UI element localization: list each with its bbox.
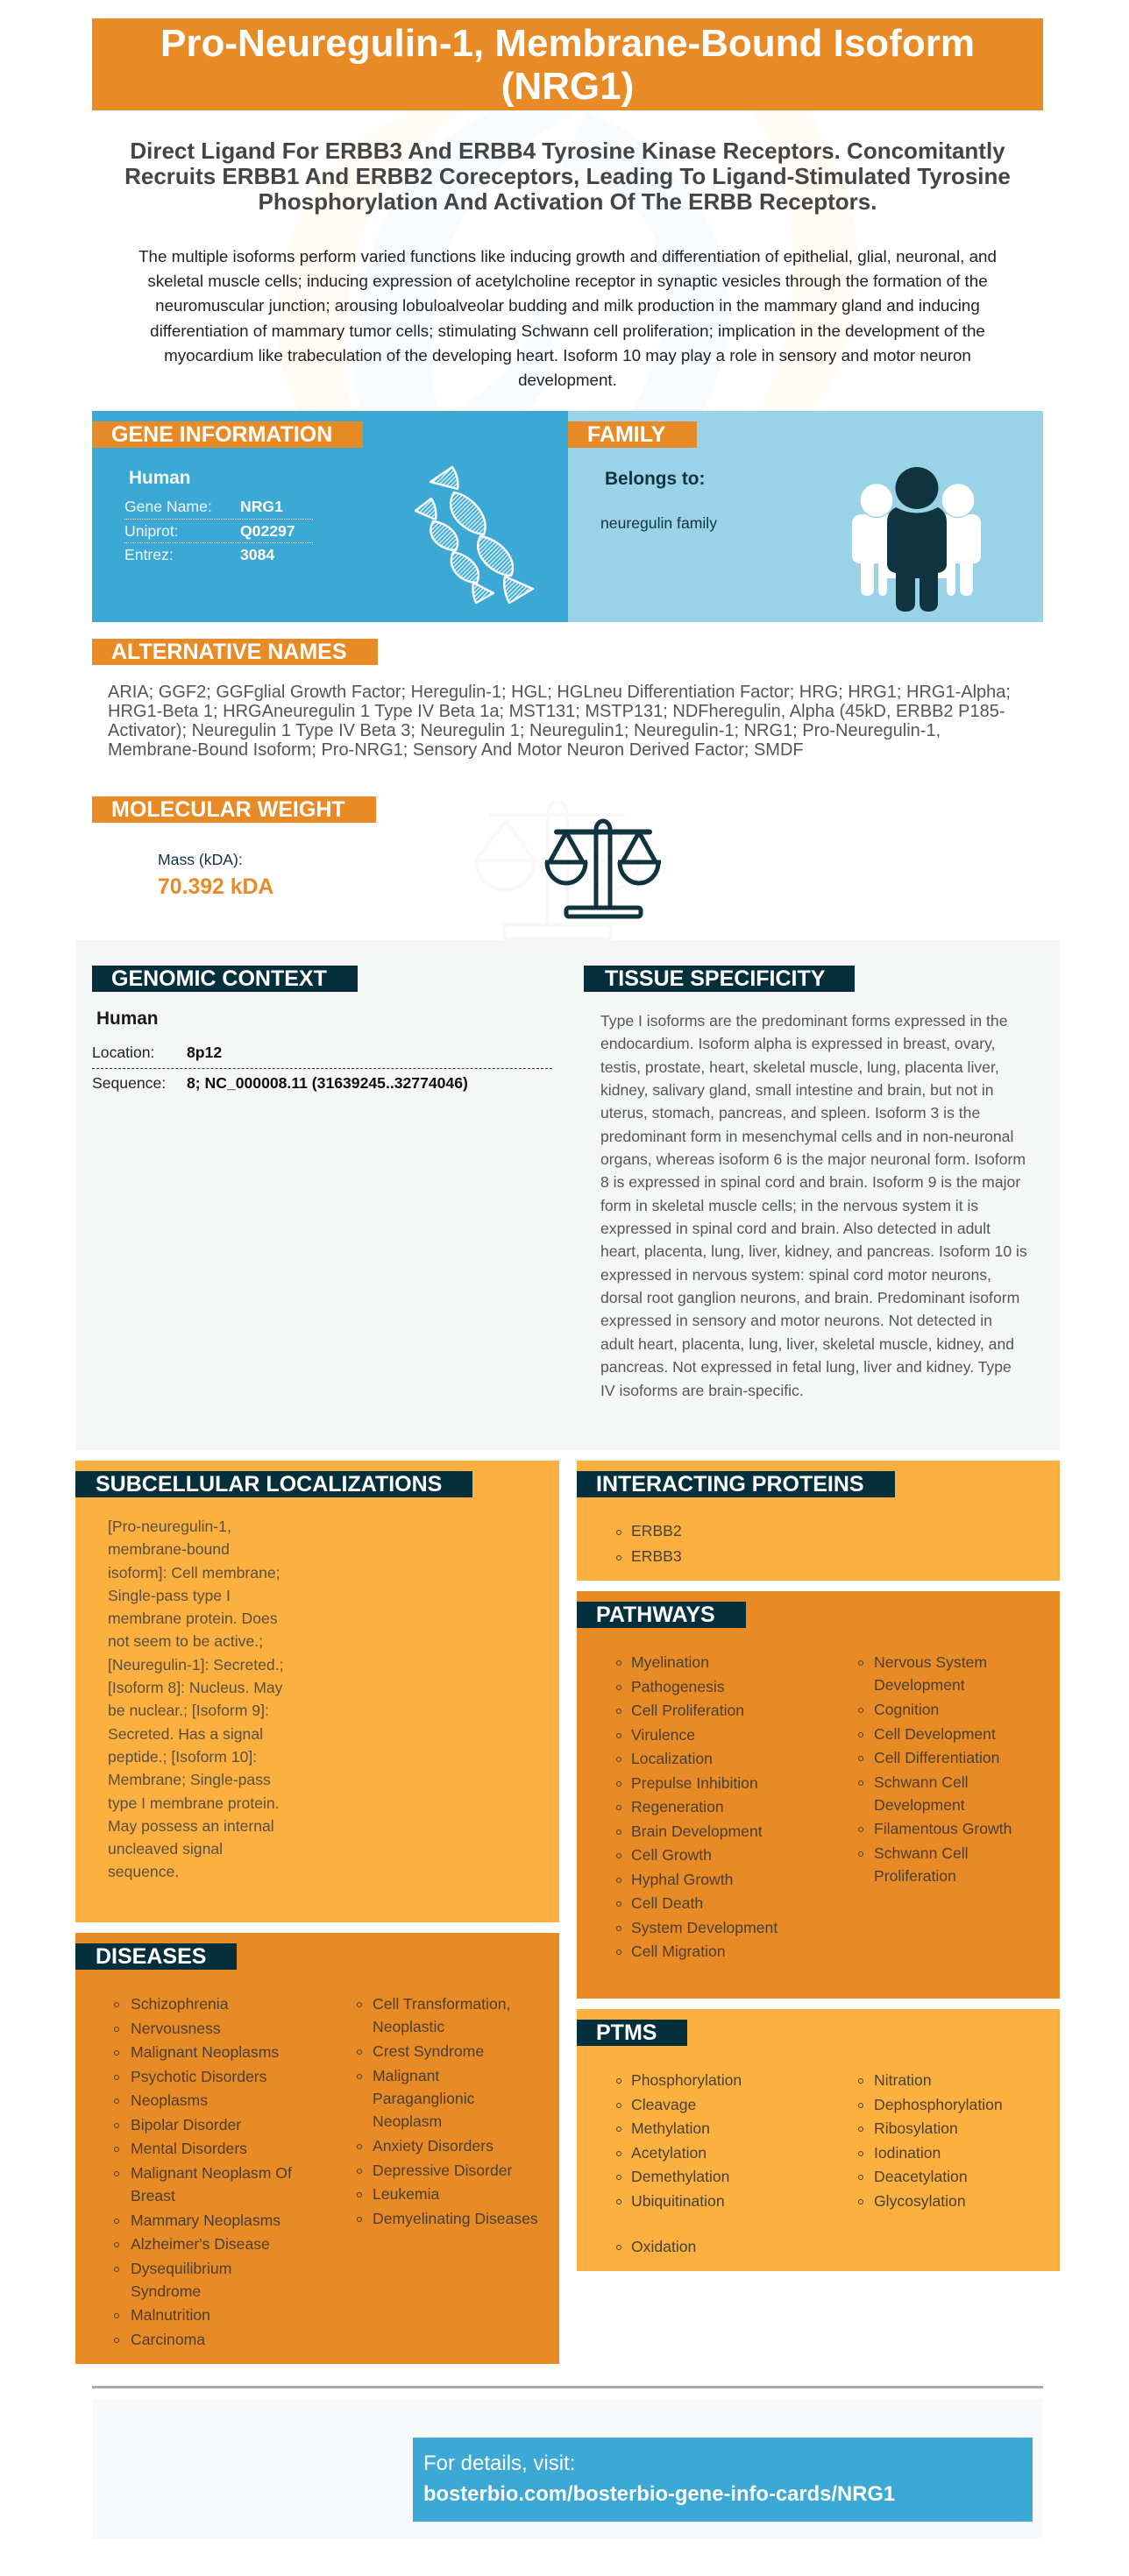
uniprot row: Uniprot: (124, 522, 179, 540)
localization text: isoform]: Cell membrane; (108, 1564, 280, 1582)
disease list column 2: Malignant (373, 2066, 439, 2084)
tissue specificity text (600, 1012, 1027, 1398)
PTM list column 2: Glycosylation (874, 2192, 966, 2210)
heading: gene information: GENE INFORMATION (111, 422, 332, 447)
localization text: membrane protein. Does (108, 1610, 278, 1627)
protein list: ERBB2 (631, 1522, 682, 1539)
pathway list column 2: Cell Development (874, 1724, 996, 1742)
gene name row: NRG1 (240, 498, 283, 515)
pathway list column 1: Localization (631, 1750, 713, 1767)
uniprot row (124, 522, 295, 540)
panel: PTMs (577, 2009, 1060, 2271)
entrez row (124, 546, 275, 563)
tissue specificity text: dorsal root ganglion neurons, and brain. Predominant isoform (600, 1289, 1019, 1306)
title banner (92, 18, 1043, 110)
callout url: bosterbio.com/bosterbio-gene-info-cards/NRG1 (423, 2482, 895, 2506)
pathway list column 2: Proliferation (874, 1867, 956, 1885)
tissue specificity text: form in skeletal muscle cells; in the nervous system it is (600, 1197, 978, 1214)
alternative names text (108, 683, 1011, 760)
PTM list column 1: Phosphorylation (631, 2071, 742, 2089)
tissue specificity text: endocardium. Isoform alpha is expressed in breast, ovary, (600, 1035, 996, 1052)
disease list column 1: Malignant Neoplasms (131, 2043, 279, 2061)
subtitle: Phosphorylation And Activation Of The ERBB Receptors. (259, 188, 877, 215)
family value: neuregulin family (600, 514, 717, 532)
pathway list column 1: Cell Migration (631, 1943, 726, 1960)
localization text: uncleaved signal (108, 1840, 223, 1858)
pathway list column 1: Brain Development (631, 1822, 763, 1840)
disease list column 1: Psychotic Disorders (131, 2068, 266, 2085)
disease list column 1: Dysequilibrium (131, 2259, 231, 2276)
heading: family (568, 421, 697, 448)
disease list column 2: Neoplasm (373, 2112, 442, 2130)
genomic species: Human (96, 1008, 158, 1029)
tissue specificity text: organs, whereas isoform 6 is the major neuronal form. Isoform (600, 1150, 1026, 1168)
localization text: sequence. (108, 1863, 179, 1880)
gene name row (124, 498, 283, 515)
entrez row: Entrez: (124, 546, 174, 563)
subtitle: Recruits ERBB1 And ERBB2 Coreceptors, Leading To Ligand-Stimulated Tyrosine (124, 163, 1011, 189)
disease list column 2: Depressive Disorder (373, 2161, 512, 2178)
pathway list column 2: Nervous System (874, 1653, 987, 1671)
protein list (616, 1522, 682, 1565)
description paragraph: development. (518, 371, 617, 389)
localization text: Membrane; Single-pass (108, 1771, 271, 1788)
alternative names text: Membrane-Bound Isoform; Pro-NRG1; Sensory And Motor Neuron Derived Factor; SMDF (108, 740, 804, 760)
disease list column 1: Schizophrenia (131, 1995, 228, 2013)
panel: interacting proteins (577, 1461, 1060, 1581)
tissue specificity text: pancreas. Not expressed in fetal lung, liver and kidney. Type (600, 1358, 1012, 1376)
localization text: [Neuregulin-1]: Secreted.; (108, 1656, 283, 1674)
sequence row: 8; NC_000008.11 (31639245..32774046) (187, 1074, 468, 1092)
description paragraph: skeletal muscle cells; inducing expression of acetylcholine receptor in synaptic vesicles through the formation of the (147, 272, 988, 290)
PTM list column 1: Methylation (631, 2120, 710, 2137)
background watermark: logo swoosh (278, 111, 857, 411)
PTM list column 2 (858, 2071, 1003, 2210)
heading: PTMs: PTMS (596, 2020, 657, 2045)
tissue specificity text: IV isoforms are brain-specific. (600, 1381, 804, 1398)
disease list column 2 (357, 1995, 538, 2227)
localization text: be nuclear.; [Isoform 9]: (108, 1702, 269, 1719)
pathway list column 1: Virulence (631, 1726, 695, 1744)
tissue specificity text: expressed in sensory and motor neurons. Not detected in (600, 1312, 992, 1329)
heading: subcellular localizations: SUBCELLULAR LOCALIZATIONS (96, 1472, 442, 1497)
heading: diseases: DISEASES (96, 1944, 206, 1969)
alternative names text: HRG1-Beta 1; HRGAneuregulin 1 Type IV Beta 1a; MST131; MSTP131; NDFheregulin, Alpha (45kD, ERBB2 P185- (108, 702, 1005, 721)
PTM list column 1: Oxidation (631, 2238, 696, 2255)
alternative names text: ARIA; GGF2; GGFglial Growth Factor; Heregulin-1; HGL; HGLneu Differentiation Factor; HRG; HRG1; HRG1-Alpha; (108, 683, 1011, 702)
panel: subcellular localizations (75, 1461, 559, 1922)
disease list column 1 (114, 1995, 292, 2348)
tissue specificity text: expressed in spinal cord and brain. Also detected in adult (600, 1220, 991, 1237)
heading: molecular weight: MOLECULAR WEIGHT (111, 797, 345, 822)
tissue specificity text: adult heart, placenta, lung, liver, skeletal muscle, kidney, and (600, 1335, 1014, 1353)
disease list column 1: Carcinoma (131, 2331, 205, 2348)
species label: Human (129, 468, 190, 488)
description paragraph: neuromuscular junction; arousing lobuloalveolar budding and milk production in the mammary gland and inducing (155, 296, 980, 315)
disease list column 2: Neoplastic (373, 2018, 444, 2035)
disease list column 1: Syndrome (131, 2282, 201, 2300)
heading: pathways: PATHWAYS (596, 1603, 715, 1627)
protein list: ERBB3 (631, 1547, 682, 1565)
pathway list column 2 (858, 1653, 1012, 1885)
panel: footer (92, 2399, 1043, 2538)
pathway list column 1: Cell Death (631, 1894, 703, 1912)
tissue specificity text: Type I isoforms are the predominant forms expressed in the (600, 1012, 1008, 1030)
mass value: 70.392 kDA (158, 875, 273, 899)
localization text: [Pro-neuregulin-1, (108, 1518, 231, 1535)
heading: genomic context: GENOMIC CONTEXT (111, 966, 327, 991)
description paragraph (138, 247, 997, 389)
localization text: type I membrane protein. (108, 1794, 280, 1812)
PTM list column 1 (616, 2071, 742, 2255)
description paragraph: differentiation of mammary tumor cells; stimulating Schwann cell proliferation; implication in the development of the (150, 322, 985, 340)
pathway list column 1: Cell Growth (631, 1846, 712, 1864)
PTM list column 2: Iodination (874, 2143, 941, 2161)
pathway list column 1: Pathogenesis (631, 1677, 725, 1695)
entrez row: 3084 (240, 546, 274, 563)
disease list column 1: Malignant Neoplasm Of (131, 2164, 292, 2182)
pathway list column 2: Development (874, 1676, 965, 1694)
disease list column 1: Bipolar Disorder (131, 2115, 241, 2133)
subtitle (124, 138, 1011, 215)
localization text: Secreted. Has a signal (108, 1725, 263, 1743)
gene name row: Gene Name: (124, 498, 212, 515)
location row (92, 1044, 222, 1061)
localization text: membrane-bound (108, 1540, 230, 1558)
callout: details link (413, 2438, 1033, 2522)
localization text: not seem to be active.; (108, 1632, 263, 1650)
localization text (108, 1518, 283, 1880)
pathway list column 2: Development (874, 1796, 965, 1814)
panel: molecular weight (92, 796, 376, 899)
disease list column 1: Mammary Neoplasms (131, 2212, 280, 2229)
pathway list column 1: Regeneration (631, 1798, 724, 1815)
location row: Location: (92, 1044, 154, 1061)
title banner: Pro-Neuregulin-1, Membrane-Bound Isoform (160, 22, 975, 65)
PTM list column 1: Cleavage (631, 2096, 696, 2113)
tissue specificity text: kidney, salivary gland, small intestine and brain, but not in (600, 1081, 994, 1099)
disease list column 1: Nervousness (131, 2019, 221, 2036)
pathway list column 1: Cell Proliferation (631, 1702, 744, 1719)
disease list column 2: Leukemia (373, 2185, 439, 2203)
disease list column 2: Crest Syndrome (373, 2042, 484, 2060)
pathway list column 2: Cell Differentiation (874, 1749, 999, 1766)
mass label: Mass (kDA): (158, 851, 243, 868)
icon: people group (852, 467, 981, 612)
pathway list column 1: Myelination (631, 1653, 709, 1671)
subtitle: Direct Ligand For ERBB3 And ERBB4 Tyrosine Kinase Receptors. Concomitantly (130, 138, 1005, 164)
pathway list column 1: Prepulse Inhibition (631, 1773, 758, 1791)
disease list column 2: Demyelinating Diseases (373, 2210, 538, 2227)
localization text: peptide.; [Isoform 10]: (108, 1748, 257, 1766)
description paragraph: myocardium like trabeculation of the developing heart. Isoform 10 may play a role in sensory and motor neuron (164, 346, 971, 364)
localization text: May possess an internal (108, 1817, 274, 1835)
localization text: Single-pass type I (108, 1587, 231, 1604)
heading: diseases (75, 1943, 237, 1970)
heading: tissue specificity: TISSUE SPECIFICITY (605, 966, 825, 991)
PTM list column 1: Ubiquitination (631, 2192, 725, 2210)
sequence row: Sequence: (92, 1074, 166, 1092)
disease list column 1: Malnutrition (131, 2306, 210, 2324)
panel: gene information (92, 411, 568, 622)
disease list column 2: Cell Transformation, (373, 1995, 510, 2013)
tissue specificity text: testis, prostate, heart, skeletal muscle, lung, placenta liver, (600, 1058, 999, 1076)
description paragraph: The multiple isoforms perform varied functions like inducing growth and differentiation of epithelial, glial, neuronal, and (138, 247, 997, 265)
tissue specificity text: heart, placenta, lung, liver, kidney, and pancreas. Isoform 10 is (600, 1242, 1027, 1260)
panel: alternative names (92, 639, 1011, 760)
pathway list column 1: Hyphal Growth (631, 1870, 733, 1887)
uniprot row: Q02297 (240, 522, 295, 540)
PTM list column 1: Acetylation (631, 2143, 707, 2161)
pathway list column 2: Cognition (874, 1701, 939, 1718)
tissue specificity text: 8 is expressed in spinal cord and brain. Isoform 9 is the major (600, 1173, 1020, 1191)
panel: pathways (577, 1591, 1060, 1999)
PTM list column 2: Dephosphorylation (874, 2096, 1003, 2113)
disease list column 2: Anxiety Disorders (373, 2137, 493, 2155)
pathway list column 2: Schwann Cell (874, 1773, 969, 1791)
heading: PTMs (577, 2020, 687, 2046)
panel: family (568, 411, 1043, 622)
callout label: For details, visit: (423, 2452, 575, 2475)
title banner: (NRG1) (501, 65, 634, 108)
heading: alternative names: ALTERNATIVE NAMES (111, 640, 347, 664)
pathway list column 2: Filamentous Growth (874, 1820, 1012, 1837)
tissue specificity text: expressed in nervous system: spinal cord motor neurons, (600, 1266, 991, 1284)
panel: diseases (75, 1933, 559, 2364)
PTM list column 2: Nitration (874, 2071, 932, 2089)
panel: genomic and tissue section (75, 940, 1060, 1450)
alternative names text: Activator); Neuregulin 1 Type IV Beta 3; Neuregulin 1; Neuregulin1; Neuregulin-1; NRG1; Pro-Neuregulin-1, (108, 721, 941, 740)
heading: family: FAMILY (587, 422, 665, 447)
disease list column 2: Paraganglionic (373, 2090, 474, 2107)
pathway list column 1: System Development (631, 1919, 778, 1936)
pathway list column 1 (616, 1653, 778, 1960)
disease list column 1: Neoplasms (131, 2091, 208, 2109)
tissue specificity text: predominant form in mesenchymal cells and in non-neuronal (600, 1128, 1013, 1145)
disease list column 1: Alzheimer's Disease (131, 2235, 270, 2253)
icon: balance scale (545, 818, 661, 918)
disease list column 1: Mental Disorders (131, 2140, 247, 2157)
belongs to label: Belongs to: (605, 469, 705, 489)
PTM list column 2: Ribosylation (874, 2120, 958, 2137)
icon: DNA double helix (414, 466, 535, 605)
PTM list column 2: Deacetylation (874, 2168, 968, 2185)
localization text: [Isoform 8]: Nucleus. May (108, 1679, 282, 1696)
pathway list column 2: Schwann Cell (874, 1844, 969, 1861)
heading: interacting proteins: INTERACTING PROTEINS (596, 1472, 864, 1497)
PTM list column 1: Demethylation (631, 2168, 729, 2185)
disease list column 1: Breast (131, 2187, 175, 2204)
location row: 8p12 (187, 1044, 222, 1061)
heading: pathways (577, 1602, 746, 1628)
tissue specificity text: uterus, stomach, pancreas, and spleen. Isoform 3 is the (600, 1104, 980, 1122)
